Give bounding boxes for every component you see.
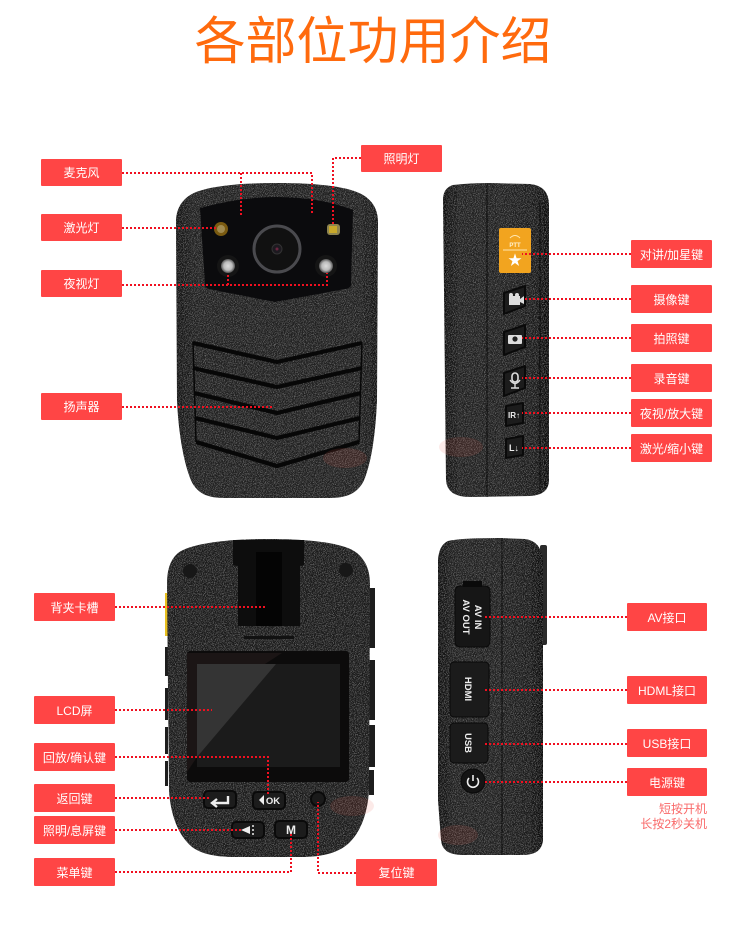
label: laser light [41,214,122,241]
speaker grille chevrons [193,342,362,466]
label: photo key: 拍照键 [653,331,690,346]
label: speaker [41,393,122,420]
label: night vision light [41,270,122,297]
back / enter button [204,791,236,808]
belt clip slot [233,540,304,639]
device: back view with LCD [165,539,375,857]
front body [176,183,378,498]
label: photo key [631,324,712,352]
label: return key: 返回键 [56,792,93,806]
label: night vision light: 夜视灯 [63,276,100,291]
label: belt clip slot [34,593,115,621]
L zoom-out button [506,436,523,458]
label: illumination light: 照明灯 [383,152,420,166]
label: return key [34,784,115,812]
label: HDML port [627,676,707,704]
M button: M [286,823,296,837]
laser LED [214,222,228,236]
label: PTT star key: 对讲/加星键 [640,247,703,262]
USB port cover [450,723,488,763]
power button [461,769,485,793]
label: laser zoom-out key [631,434,712,462]
label: menu key [34,858,115,886]
label: speaker: 扬声器 [63,399,100,414]
side body [443,183,549,497]
LCD screen [187,651,349,782]
device: port side view [438,538,547,855]
title: 各部位功用介绍 [194,13,552,70]
label: power key [627,768,707,796]
label: playback confirm key: 回放/确认键 [43,750,106,765]
label: record key: 录音键 [653,371,690,386]
label: illumination light [361,145,442,172]
side buttons [165,588,375,795]
callout lines [115,158,631,873]
label: light / screen-off key: 照明/息屏键 [43,823,106,838]
label: video key: 摄像键 [653,292,690,307]
label: night vision zoom-in key: 夜视/放大键 [640,406,703,421]
AV port cover: AV OUT [460,599,471,635]
label: microphone [41,159,122,186]
light button [232,822,264,838]
label: PTT star key [631,240,712,268]
lens [254,226,300,272]
device: front view [176,183,378,498]
label: laser zoom-out key: 激光/缩小键 [640,441,703,456]
yellow side button [165,593,168,636]
label: laser light: 激光灯 [63,221,100,235]
power key note [640,802,707,831]
label: USB port [627,729,707,757]
AV port cover: AV IN [472,605,483,629]
screw holes [183,563,353,578]
video button [504,286,525,314]
label: power key: 电源键 [649,776,685,790]
label: menu key: 菜单键 [56,866,93,880]
label: AV port: AV接口 [647,610,687,625]
IR zoom-in button: IR↑ [508,411,520,420]
camera window [200,197,353,302]
label: video key [631,285,712,313]
label: microphone: 麦克风 [63,166,100,180]
label: LCD screen [34,696,115,724]
port side body [438,538,543,855]
night-vision LEDs [217,255,337,277]
label: light / screen-off key [34,816,115,844]
label: AV port [627,603,707,631]
label: belt clip slot: 背夹卡槽 [50,601,99,615]
HDMI port cover [450,662,489,717]
IR zoom-in button [506,403,523,426]
PTT star button: ★ [508,252,522,268]
label: playback confirm key [34,743,115,771]
label: USB port: USB接口 [643,736,691,751]
photo button [504,325,525,355]
PTT star button [499,228,531,273]
label: record key [631,364,712,392]
label: HDML port: HDML接口 [638,683,696,698]
label: reset key: 复位键 [378,865,415,880]
OK button [253,792,285,809]
AV port cover [455,581,490,647]
record button [504,366,525,396]
PTT star button: PTT [509,243,521,249]
illumination LED [327,224,340,235]
power key note: 长按2秒关机 [640,817,707,831]
USB port cover: USB [462,733,473,753]
reset button [311,792,325,806]
label: reset key [356,859,437,886]
HDMI port cover: HDMI [462,677,473,701]
label: LCD screen: LCD屏 [56,704,93,718]
device: side view with buttons [443,183,549,497]
M button [275,821,307,838]
label: night vision zoom-in key [631,399,712,427]
watermarks [323,437,483,845]
back body [167,539,370,857]
OK button: OK [266,796,280,807]
L zoom-out button: L↓ [509,443,519,453]
power key note: 短按开机 [659,802,707,816]
rear clip strip [540,545,547,645]
